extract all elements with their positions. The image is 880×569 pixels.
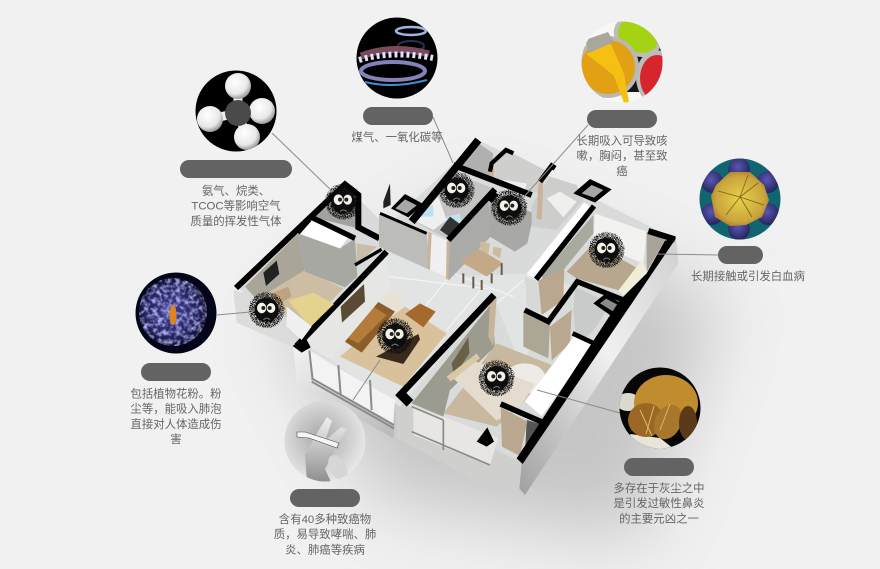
soot sprite 6 <box>380 321 410 351</box>
main floor <box>330 252 577 407</box>
description <box>576 134 668 178</box>
panel: paint <box>577 22 668 176</box>
panel: benzene <box>691 158 805 283</box>
description <box>130 386 222 446</box>
infographic canvas <box>130 18 804 563</box>
outer right wall <box>517 238 676 464</box>
description <box>190 184 282 228</box>
kitchen and bathroom black walls <box>412 140 555 240</box>
description <box>274 512 376 556</box>
building shadow <box>280 200 720 540</box>
upper right bedroom <box>567 213 675 298</box>
building base fill <box>237 140 673 463</box>
icon: dust mite <box>616 367 701 449</box>
description: 氨气、烷类、 <box>202 184 270 198</box>
description: 尘等，能吸入肺泡 <box>130 402 222 416</box>
description: 多存在于灰尘之中 <box>613 481 705 495</box>
description: 包括植物花粉。粉 <box>130 386 222 400</box>
living room windows <box>309 351 395 428</box>
description: 炎、肺癌等疾病 <box>285 542 365 556</box>
right wing wall and storage <box>525 179 612 315</box>
label pill <box>180 160 292 178</box>
description: 癌 <box>616 164 628 178</box>
panel: pollen and dust <box>130 272 222 446</box>
description: 嗽，胸闷，甚至致 <box>576 148 668 162</box>
soot sprite 4 <box>592 235 621 265</box>
description: 的主要元凶之一 <box>619 512 699 526</box>
icon: pollen particle <box>135 272 217 354</box>
soot sprite 1 <box>329 187 358 216</box>
panel: tobacco smoke <box>274 400 376 556</box>
living room rug and furniture <box>340 292 447 387</box>
bedroom 1 closet <box>313 187 358 228</box>
floor tile joints <box>390 257 523 330</box>
exterior faces <box>233 238 678 495</box>
description: 质，易导致哮喘、肺 <box>274 527 376 541</box>
icon: paint cans <box>582 22 662 102</box>
description: TCOC等影响空气 <box>191 198 281 212</box>
soot sprite 7 <box>482 364 511 393</box>
dining table <box>460 242 503 290</box>
description: 害 <box>170 432 182 446</box>
label pill <box>290 489 360 507</box>
panel: dust mites <box>613 367 705 526</box>
bedroom 1 black walls <box>236 184 382 288</box>
soot sprite 5 <box>252 295 281 325</box>
label pill <box>363 107 433 125</box>
label pill <box>718 246 763 264</box>
panel: volatile organic gases <box>180 70 292 228</box>
description: 长期接触或引发白血病 <box>691 269 805 283</box>
lower white storage and door <box>501 333 594 456</box>
leader lines <box>217 117 718 413</box>
icon: gas flame <box>356 17 438 99</box>
description: 含有40多种致癌物 <box>279 512 371 526</box>
bedroom 1 <box>245 221 377 340</box>
living room wall <box>293 252 391 359</box>
panel: gas <box>351 17 443 144</box>
bathroom and kitchen block <box>379 143 583 281</box>
label pill <box>141 363 211 381</box>
label pill <box>587 110 657 128</box>
label pill <box>624 458 694 476</box>
lower bath <box>523 282 627 361</box>
soot sprite 2 <box>442 175 471 205</box>
icon: molecule <box>195 70 277 152</box>
lower bedroom <box>395 295 552 465</box>
description: 质量的挥发性气体 <box>190 214 282 228</box>
description: 煤气、一氧化碳等 <box>351 130 443 144</box>
icon: hand with cigarette <box>284 400 366 484</box>
soot sprite 3 <box>495 193 524 222</box>
description: 直接对人体造成伤 <box>130 417 222 431</box>
description: 是引发过敏性鼻炎 <box>613 496 705 510</box>
description <box>613 481 705 526</box>
icon: benzene model <box>699 158 781 240</box>
description: 长期吸入可导致咳 <box>576 134 668 148</box>
floor plan model <box>233 140 678 495</box>
